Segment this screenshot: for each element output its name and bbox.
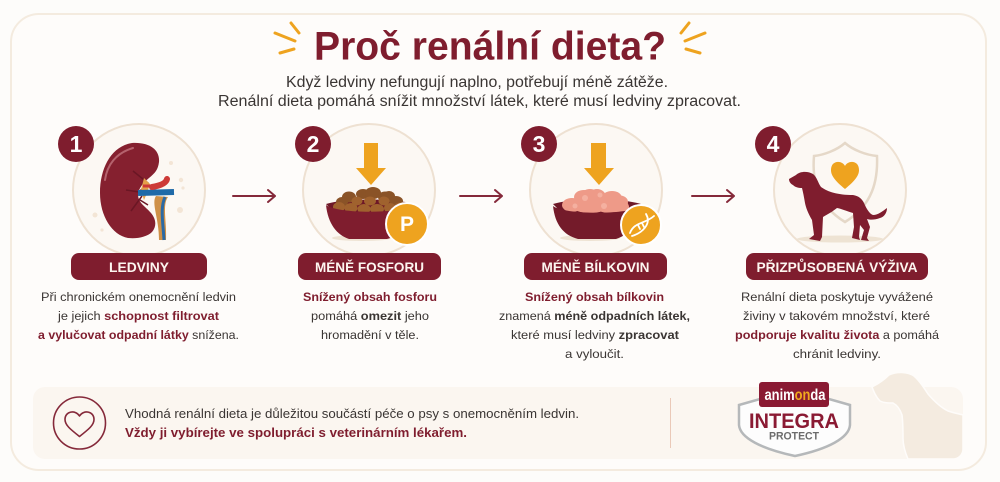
text: step 1 (38, 290, 239, 342)
label: méně fosforu (298, 253, 441, 280)
text: step 3: Snížený obsah bílkovin (525, 290, 664, 304)
text: step 1: a vylučovat odpadní látky snížena. (38, 328, 239, 342)
illustration circle 4 (774, 124, 906, 256)
divider (670, 398, 671, 448)
text: step 4 (735, 290, 939, 361)
illustration circle 1 (73, 124, 205, 256)
label: ledviny (71, 253, 207, 280)
icon: heart in circle (54, 397, 106, 449)
icon: bowl with kibble (326, 187, 414, 241)
icon: phosphorus badge (386, 203, 428, 245)
text: step 2 (303, 290, 437, 342)
arrow 1 (233, 190, 275, 202)
text: step 2: pomáhá omezit jeho (311, 309, 429, 323)
step number 3 (521, 126, 557, 162)
text: step 3: které musí ledviny zpracovat (511, 328, 679, 342)
text: step 4: Renální dieta poskytuje vyvážené (741, 290, 933, 304)
label: méně bílkovin: MÉNĚ BÍLKOVIN (542, 260, 650, 275)
label: přizpůsobená výživa (746, 253, 928, 280)
intro text (218, 74, 741, 110)
step number 2 (295, 126, 331, 162)
text: step 3: a vyloučit. (565, 347, 624, 361)
text: step 4: živiny v takovém množství, které (743, 309, 930, 323)
label: méně fosforu: MÉNĚ FOSFORU (315, 260, 424, 275)
note background (33, 387, 963, 459)
intro text: Renální dieta pomáhá snížit množství látek, které musí ledviny zpracovat. (218, 93, 741, 110)
arrow 3 (692, 190, 734, 202)
text: step 2: Snížený obsah fosforu (303, 290, 437, 304)
step number 4 (755, 126, 791, 162)
text: step 1: je jejich schopnost filtrovat (57, 309, 219, 323)
logo: animonda integra protect: animonda (764, 387, 826, 404)
text: step 4: chránit ledviny. (793, 347, 881, 361)
panel: step 3 less protein (499, 124, 690, 361)
title: Proč renální dieta? (314, 24, 666, 68)
icon: right title rays (681, 23, 705, 53)
note text (125, 407, 579, 440)
text: step 1: Při chronickém onemocnění ledvin (41, 290, 236, 304)
text: step 3 (499, 290, 690, 361)
label: méně bílkovin (524, 253, 667, 280)
step number 3: 3 (533, 131, 545, 157)
icon: dog (789, 172, 887, 242)
step number 1: 1 (70, 131, 83, 157)
icon: left title rays (275, 23, 299, 53)
icon: down arrow (584, 143, 614, 185)
panel: step 4 adapted nutrition (735, 124, 939, 361)
step number 2: 2 (307, 131, 319, 157)
illustration circle 2 (303, 124, 435, 256)
panel: step 1 kidneys (38, 124, 239, 342)
note text: Vždy ji vybírejte ve spolupráci s veterinárním lékařem. (125, 426, 467, 440)
icon: down arrow (356, 143, 386, 185)
step number 1 (58, 126, 94, 162)
icon: phosphorus badge: P (400, 213, 414, 236)
icon: DNA badge (621, 205, 661, 245)
icon: heart (831, 162, 859, 189)
icon: shield (814, 143, 877, 222)
intro text: Když ledviny nefungují naplno, potřebují méně zátěže. (286, 74, 668, 91)
decorative specks (92, 161, 185, 232)
text: step 2: hromadění v těle. (321, 328, 419, 342)
text: step 4: podporuje kvalitu života a pomáhá (735, 328, 939, 342)
icon: bowl with meat (553, 189, 641, 241)
panel: bottom note (33, 372, 963, 459)
panel: step 2 less phosphorus (295, 124, 441, 342)
logo: animonda integra protect: PROTECT (769, 430, 819, 442)
illustration circle 3 (530, 124, 662, 256)
label: přizpůsobená výživa: PŘIZPŮSOBENÁ VÝŽIVA (756, 259, 918, 275)
arrow 2 (460, 190, 502, 202)
logo: animonda integra protect: INTEGRA (749, 410, 839, 433)
text: step 3: znamená méně odpadních látek, (499, 309, 690, 323)
logo: animonda integra protect (739, 382, 850, 456)
step number 4: 4 (767, 131, 780, 157)
label: ledviny: LEDVINY (109, 260, 169, 275)
icon: kidney (100, 143, 174, 240)
icon: background dog silhouette (872, 372, 963, 459)
note text: Vhodná renální dieta je důležitou součástí péče o psy s onemocněním ledvin. (125, 407, 579, 421)
